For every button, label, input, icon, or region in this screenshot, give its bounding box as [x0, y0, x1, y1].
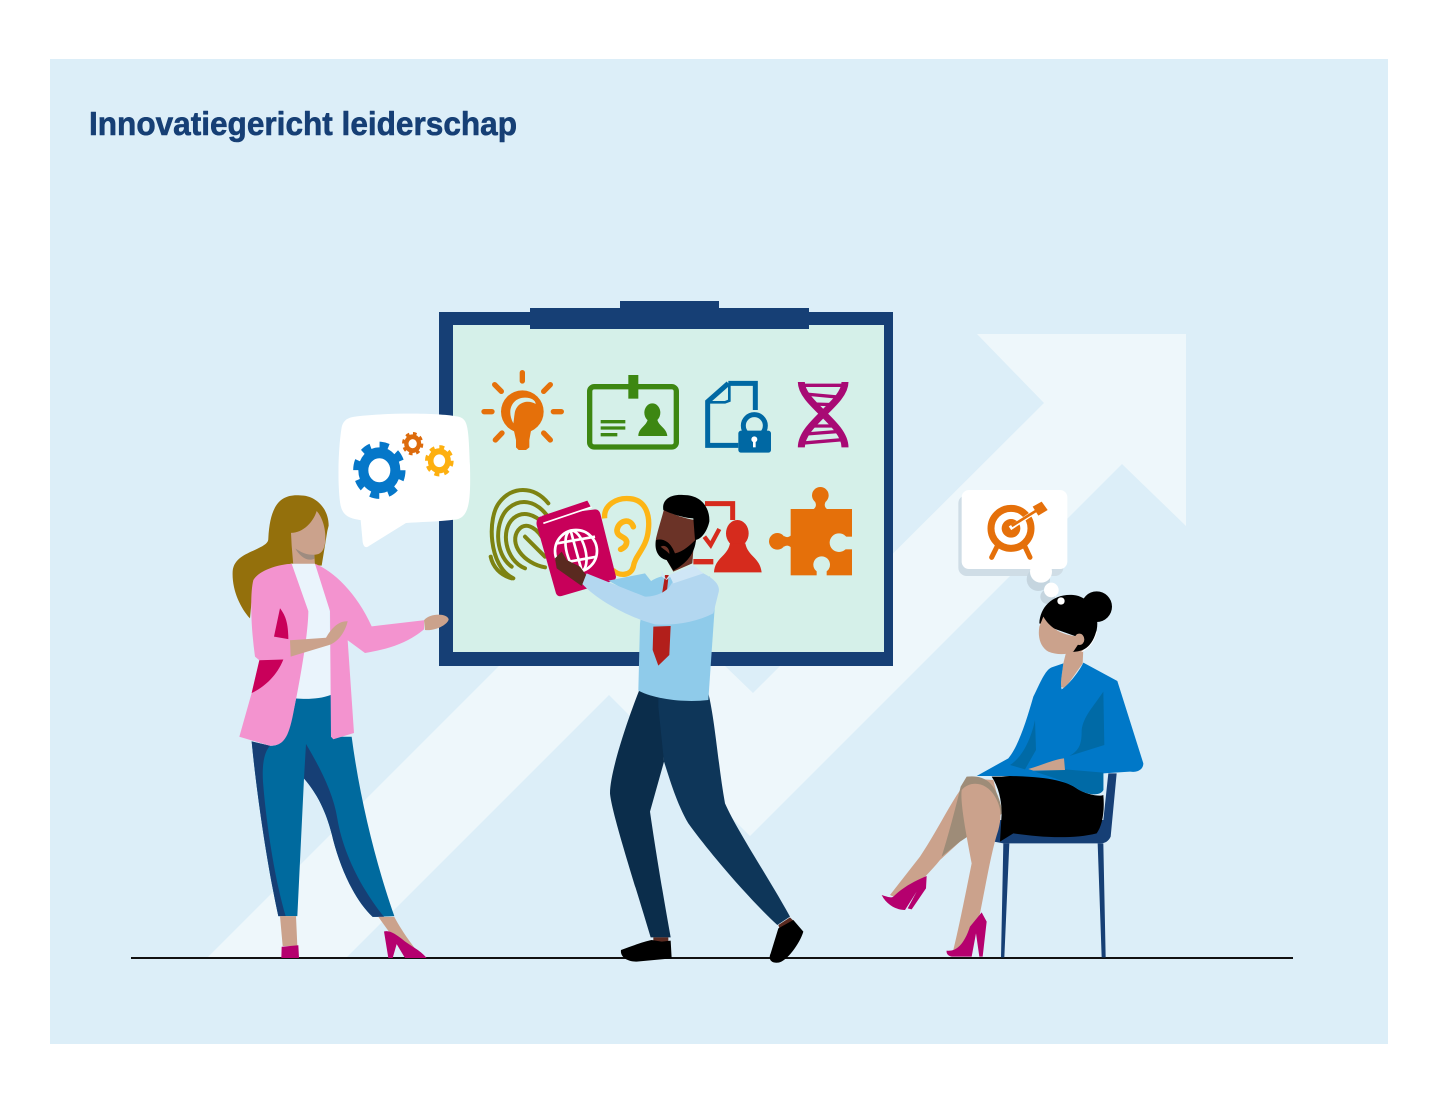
speech bubble — [338, 414, 470, 547]
head — [656, 509, 697, 572]
icon: person with checkmark — [693, 504, 762, 572]
face — [1039, 617, 1083, 654]
figure: woman with pink jacket and speech bubble — [233, 414, 470, 958]
hair — [233, 495, 329, 618]
figure: seated woman with thought bubble — [882, 490, 1143, 957]
skirt — [992, 775, 1104, 842]
legs and heels — [280, 916, 417, 950]
passport icon — [536, 501, 616, 596]
front arm sleeve — [582, 571, 719, 625]
ankles — [653, 917, 793, 943]
face and neck — [291, 511, 325, 566]
shoes — [621, 920, 803, 963]
hair highlights — [1082, 632, 1097, 652]
blue top — [977, 663, 1143, 794]
neck — [1060, 648, 1083, 688]
hair and bun — [1039, 591, 1112, 652]
background growth arrow — [208, 334, 1186, 957]
back arm — [608, 573, 663, 600]
beard — [656, 539, 696, 571]
tie — [653, 575, 671, 666]
back leg — [610, 688, 671, 937]
front leg — [658, 693, 790, 925]
hand — [1028, 758, 1065, 771]
hair — [663, 495, 709, 540]
pink jacket — [239, 564, 424, 746]
chair — [994, 773, 1117, 957]
shirt — [638, 575, 715, 701]
icon: dna helix — [800, 382, 847, 447]
icon: orange gear — [403, 433, 422, 454]
presentation board — [439, 301, 893, 666]
icon: fingerprint — [491, 490, 548, 578]
collar — [662, 565, 703, 583]
icon: yellow gear — [427, 447, 452, 475]
white shirt — [291, 564, 331, 699]
hand — [555, 552, 586, 586]
top shadow — [1010, 692, 1104, 794]
icon: blue gear — [356, 445, 403, 496]
ground line — [131, 957, 1293, 959]
title: Innovatiegericht leiderschap — [89, 105, 517, 142]
icon: puzzle piece — [769, 487, 852, 576]
icon: ear — [605, 499, 649, 574]
board icons — [484, 373, 852, 578]
trousers — [252, 695, 394, 917]
icon: id card — [590, 375, 676, 447]
icon: document lock — [708, 383, 771, 453]
figure: man holding passport — [555, 495, 803, 963]
crossed back leg — [890, 778, 1002, 902]
icon: target with arrow — [991, 502, 1048, 557]
thought bubble — [958, 490, 1067, 604]
front leg — [953, 784, 1001, 950]
icon: light bulb — [484, 373, 561, 450]
heels — [882, 876, 987, 957]
arm and hands — [290, 615, 449, 657]
